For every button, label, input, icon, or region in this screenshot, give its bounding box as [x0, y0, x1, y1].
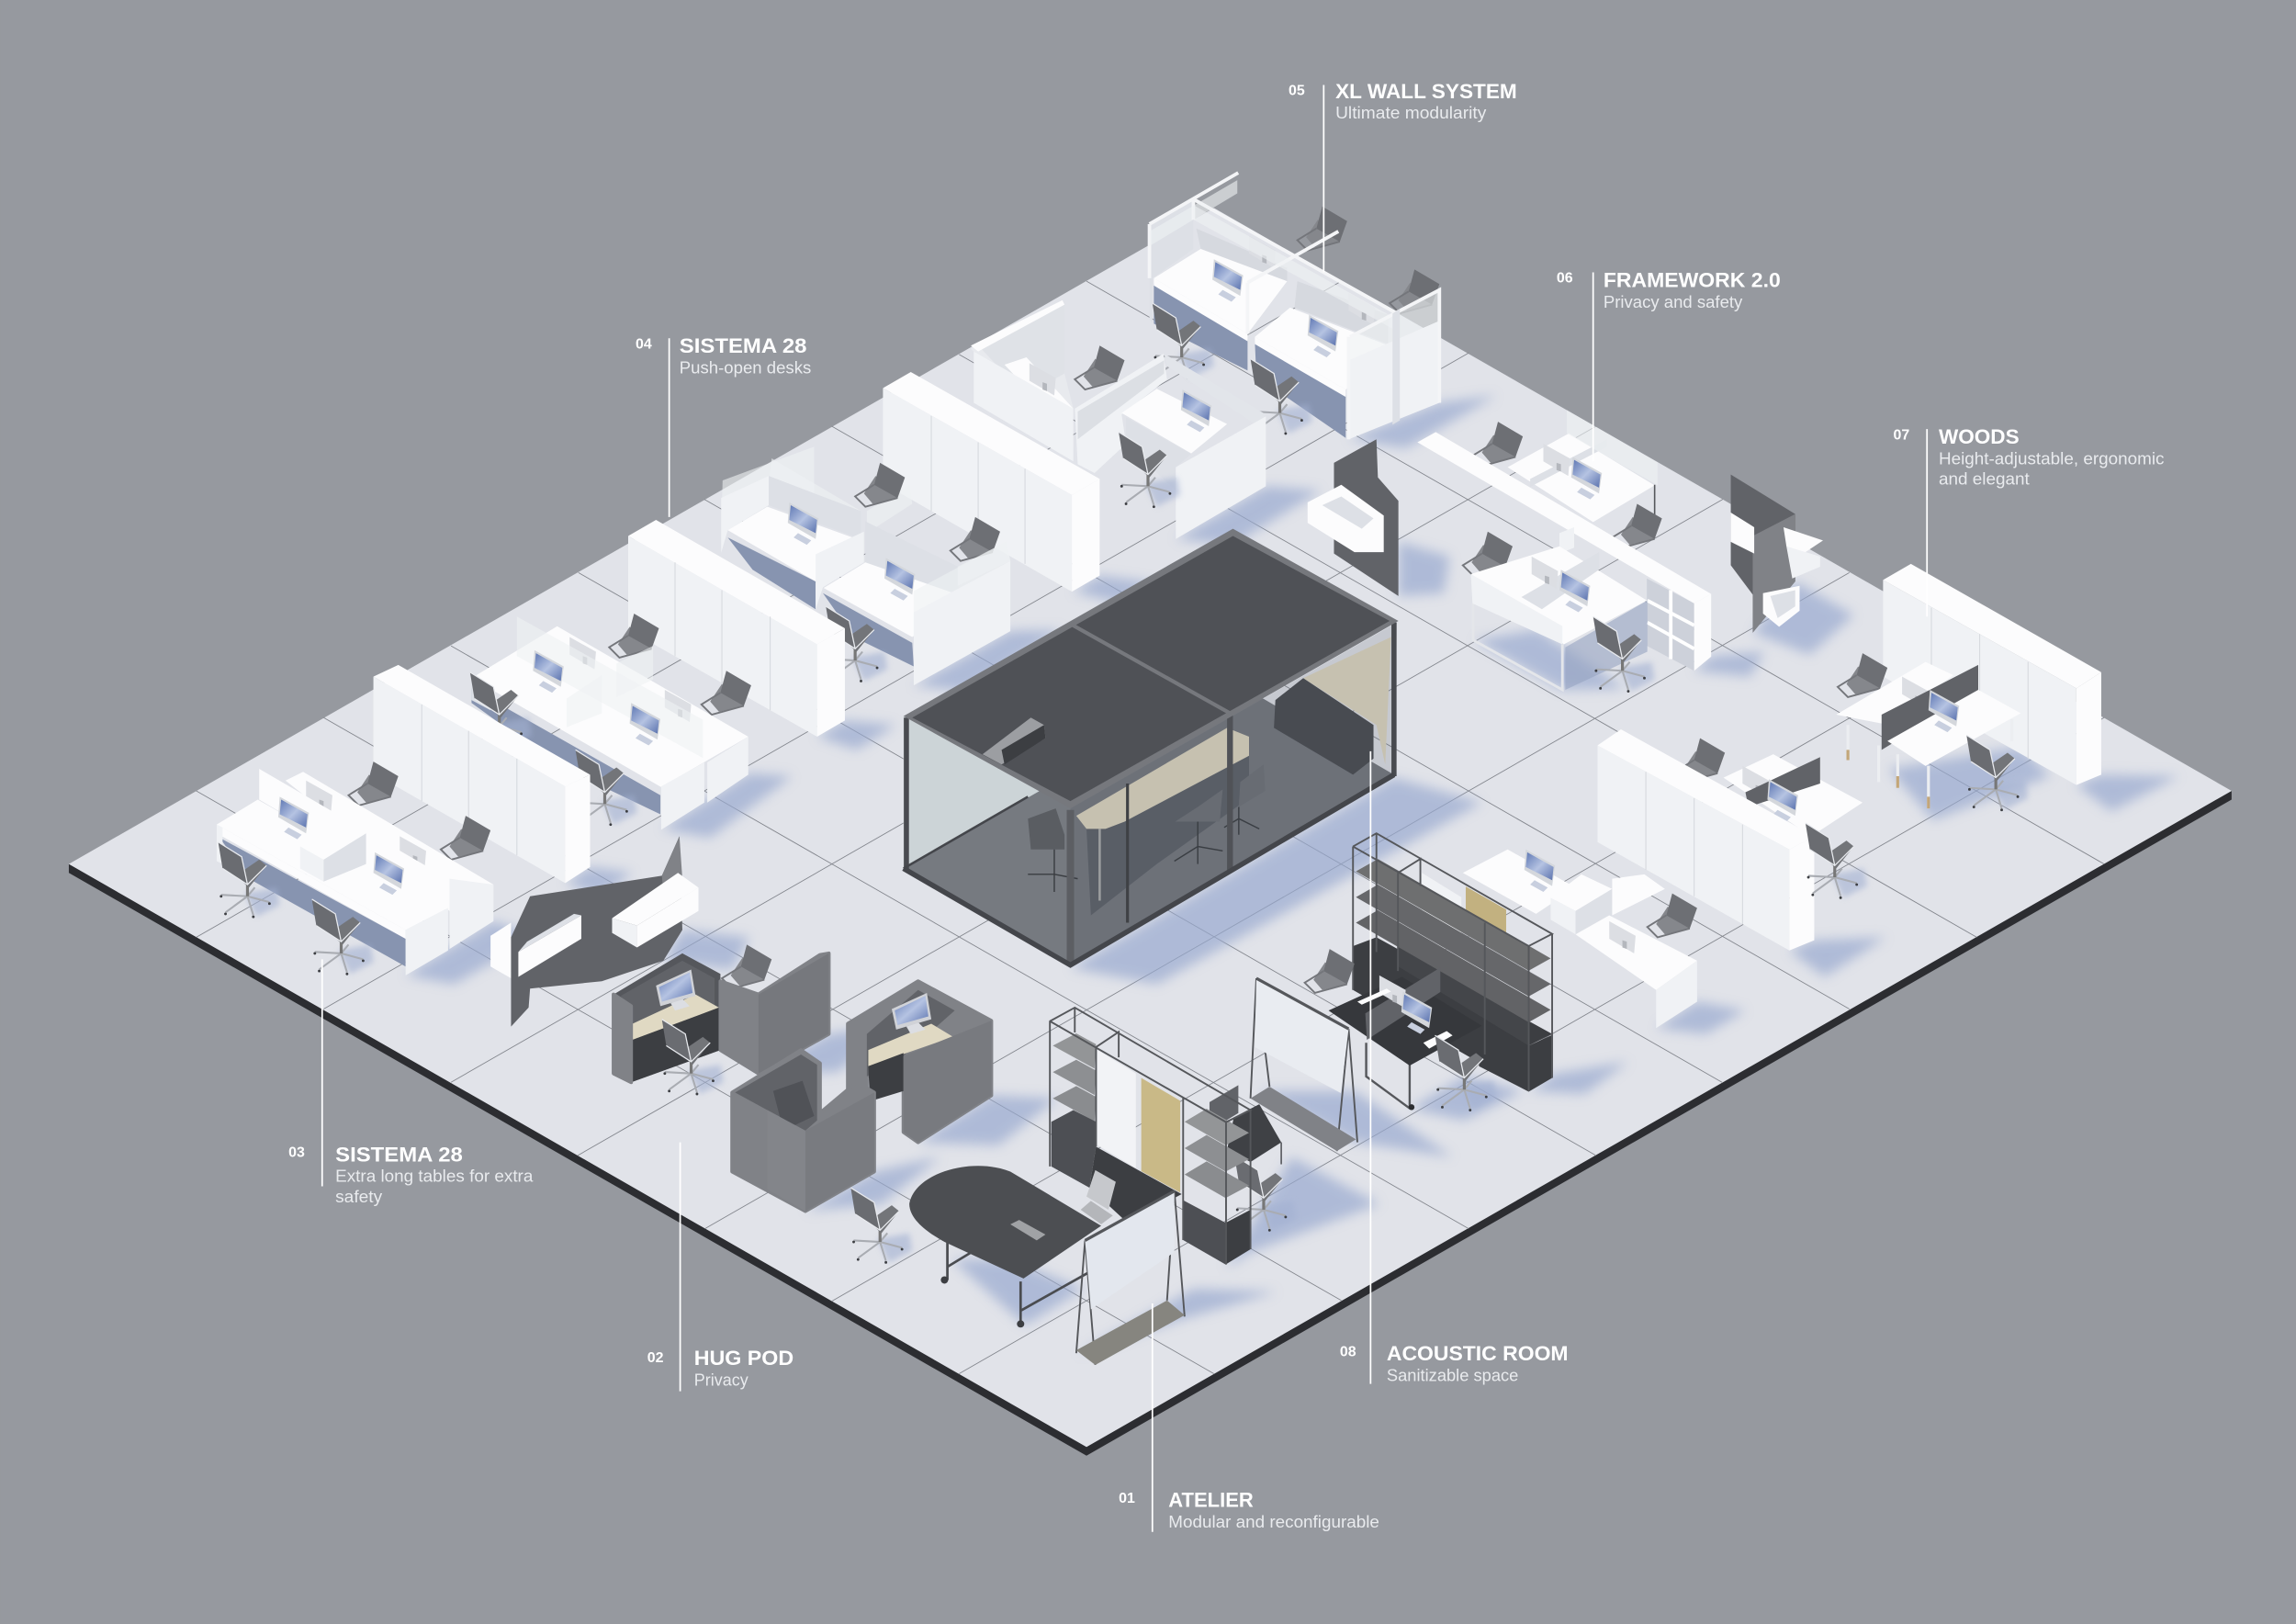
front desk: [1471, 547, 1647, 645]
desk: [1126, 417, 1191, 491]
middle wall: [1075, 354, 1167, 473]
07 woods workstation: [1836, 564, 2101, 811]
label 08 acoustic room: 08: [1340, 1344, 1356, 1359]
chair beside hug pod: [850, 1188, 912, 1264]
08 dark shelving and desk: [1305, 833, 1552, 1111]
label 05 xl wall system: 05: [1289, 84, 1305, 99]
pedestal cube: [300, 821, 366, 860]
carpet: [904, 681, 1394, 965]
desk behind lower cabinet: [1675, 739, 1863, 836]
label 03 sistema 28: Extra long tables for extra: [335, 1167, 534, 1186]
shelf boards: [1356, 859, 1550, 971]
04 sistema 28 push-open desks: [721, 446, 1010, 685]
sistema 28 long table group: [470, 614, 751, 829]
roof vent: [983, 717, 1045, 764]
label 04 sistema 28: [636, 334, 811, 517]
label 03 sistema 28: SISTEMA 28: [335, 1143, 463, 1166]
label 04 sistema 28: Push-open desks: [680, 358, 811, 378]
label 05 xl wall system: Ultimate modularity: [1335, 103, 1487, 122]
label 05 xl wall system: XL WALL SYSTEM: [1335, 80, 1517, 103]
end panel: [1176, 416, 1266, 539]
white panel: [1097, 1050, 1136, 1168]
desk 1: [1154, 249, 1287, 334]
right acoustic screen with shelves: [1731, 475, 1823, 633]
label 02 hug pod: 02: [647, 1350, 664, 1366]
mid panel: [816, 532, 864, 609]
desk 2: [823, 593, 914, 666]
left glass backdrop: [904, 716, 1070, 965]
label 07 woods: WOODS: [1939, 425, 2020, 448]
03 sistema 28 extra long tables: [217, 761, 493, 976]
label 01 atelier: ATELIER: [1168, 1489, 1254, 1512]
01 atelier shelving: [1050, 1008, 1251, 1265]
left side panel: [1150, 200, 1193, 323]
glass screen: [1567, 410, 1658, 485]
label 03 sistema 28: 03: [288, 1145, 305, 1161]
whiteboard front: [1076, 1190, 1185, 1365]
cork panel: [1142, 1077, 1180, 1192]
shelf: [1308, 485, 1384, 552]
desk tops: [1836, 662, 1953, 724]
frosted glass: [517, 616, 703, 758]
second cubicle rear wall: [1165, 354, 1266, 424]
floor platform: [69, 208, 2232, 1456]
cubicle workstation: [971, 300, 1266, 539]
label 02 hug pod: HUG POD: [694, 1347, 793, 1370]
bookcase: [1647, 579, 1694, 671]
cabinet: sistema 04: [628, 520, 845, 737]
dark desk: [1367, 1043, 1410, 1109]
roof: [904, 529, 1399, 808]
acoustic room: [904, 529, 1399, 965]
white and cork panels behind: [1422, 873, 1461, 937]
label 03 sistema 28: safety: [335, 1187, 383, 1206]
end panel: [914, 561, 1010, 685]
label 03 sistema 28: [288, 959, 534, 1206]
right shelf boards: [1185, 1109, 1249, 1145]
label 07 woods: Height-adjustable, ergonomic: [1939, 448, 2164, 468]
front desk: [217, 800, 448, 930]
label 06 framework 2.0: Privacy and safety: [1604, 292, 1743, 311]
table: [1086, 756, 1249, 915]
pod 1: [613, 953, 720, 1082]
label 01 atelier: 01: [1119, 1491, 1135, 1506]
shelves: [1784, 527, 1823, 555]
right glass tint: [1070, 623, 1397, 965]
lower cabinet: [1529, 1035, 1552, 1091]
05 xl wall system workstation: [1150, 173, 1439, 439]
rear glass: [722, 446, 814, 505]
bottom rails: [904, 774, 1394, 965]
long beam: [1417, 432, 1711, 603]
cabinet: left: [374, 665, 591, 883]
back desk: [1508, 434, 1655, 522]
back desk: [286, 772, 493, 911]
small acoustic screen with shelf: [1308, 439, 1399, 596]
end panel: [1348, 321, 1439, 439]
label 08 acoustic room: Sanitizable space: [1387, 1365, 1518, 1384]
cabinet: top centre: [883, 372, 1099, 592]
pod 3: [732, 1050, 874, 1212]
shelf units: [518, 915, 581, 976]
desk legs: [1848, 719, 2012, 808]
label 08 acoustic room: ACOUSTIC ROOM: [1387, 1342, 1569, 1365]
label 07 woods: 07: [1894, 427, 1909, 443]
silver chair at table: [1081, 1170, 1116, 1224]
right cabinet: [1183, 1201, 1226, 1265]
label 06 framework 2.0: 06: [1557, 271, 1573, 287]
02 hug pod group: [613, 944, 991, 1212]
mullions: [905, 717, 908, 870]
rear chairs: [1298, 207, 1347, 251]
small dark desk and chair: [1210, 1085, 1296, 1232]
label 05 xl wall system: [1289, 80, 1517, 273]
label 02 hug pod: [647, 1143, 793, 1392]
label 04 sistema 28: SISTEMA 28: [680, 334, 807, 357]
rear wall cream panel: [1303, 637, 1391, 764]
label 07 woods: and elegant: [1939, 469, 2030, 489]
desk 1: [727, 537, 816, 609]
label 06 framework 2.0: FRAMEWORK 2.0: [1604, 268, 1781, 291]
lower desk behind shelves: [1463, 850, 1697, 1028]
rear cubicle interior: [971, 300, 1074, 409]
pod 2: [848, 981, 991, 1143]
label 04 sistema 28: 04: [636, 336, 652, 352]
frame rails: [1150, 173, 1397, 334]
left acoustic screen with shelves: [490, 836, 699, 1027]
end faces: [661, 762, 704, 829]
chairs inside: [1028, 808, 1064, 850]
steel frame: [1050, 1008, 1251, 1265]
label 01 atelier: [1119, 1303, 1379, 1532]
cabinet inside: [1274, 678, 1374, 774]
label 02 hug pod: Privacy: [694, 1370, 748, 1389]
perforated rear walls: [1197, 229, 1287, 281]
dark interior: [1353, 937, 1552, 1091]
cabinet: lower right: [1597, 729, 1814, 951]
floor shadows: [406, 395, 2178, 1355]
steel frame: [1353, 833, 1552, 1091]
label 01 atelier: Modular and reconfigurable: [1168, 1512, 1379, 1531]
chair beside cabinet: [1806, 823, 1867, 899]
label 06 framework 2.0: [1557, 268, 1781, 461]
rear cubicle long face: [974, 352, 1074, 461]
desk 2: [1255, 308, 1392, 389]
label 08 acoustic room: [1340, 751, 1569, 1384]
meeting table: [909, 1166, 1101, 1327]
partition: [259, 769, 448, 911]
left wall and rear wall: [721, 476, 769, 553]
whiteboard rear: [1251, 978, 1357, 1151]
rear wall 2: [865, 522, 959, 598]
cabinet: [1883, 564, 2101, 688]
label 07 woods: [1894, 425, 2164, 616]
06 framework 2.0 workstation: [1417, 410, 1711, 693]
front desk frame: [1473, 603, 1562, 690]
lower cabinets: [1052, 1111, 1096, 1188]
left shelf boards: [1052, 1033, 1096, 1068]
chairs far side: [855, 463, 905, 507]
table top: [471, 626, 748, 787]
under desk: [471, 688, 660, 814]
